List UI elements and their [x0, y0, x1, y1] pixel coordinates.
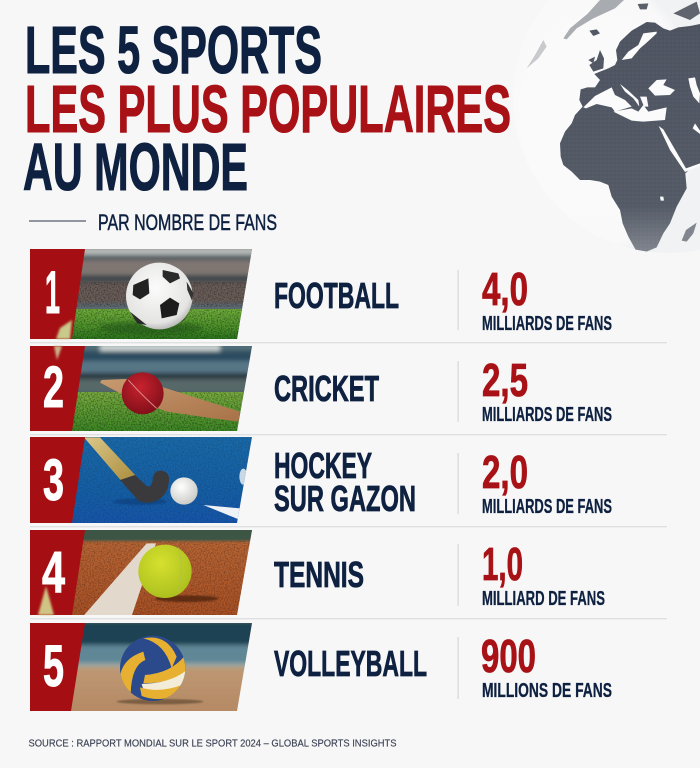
stat: volleyball: 900: [481, 630, 536, 682]
source: SOURCE : RAPPORT MONDIAL SUR LE SPORT 2024 – GLOBAL SPORTS INSIGHTS: [28, 738, 396, 750]
stat: cricket: [482, 354, 612, 426]
stat: football: 4,0: [482, 263, 528, 315]
icon: hockey stick: [84, 437, 169, 503]
divider: [458, 637, 459, 699]
title: [23, 13, 511, 205]
photo: hockey: [72, 437, 252, 523]
icon: cricket bat: [100, 379, 240, 422]
divider: [458, 270, 459, 330]
stat: tennis: MILLIARD DE FANS: [482, 588, 605, 610]
sport: hockey sur gazon: SUR GAZON: [274, 478, 416, 519]
map: continents: [515, 0, 700, 252]
photo: cricket: [72, 346, 252, 431]
icon: volleyball: [120, 636, 186, 701]
stat: tennis: [482, 538, 605, 610]
badge: rank 2: 2: [43, 355, 64, 420]
badge: rank 5: [30, 623, 85, 711]
stat: volleyball: MILLIONS DE FANS: [482, 680, 612, 702]
sport: volleyball: VOLLEYBALL: [274, 643, 427, 684]
icon: cricket ball: [122, 372, 164, 414]
divider: [458, 544, 459, 606]
photo: football: [72, 249, 252, 339]
sport: football: FOOTBALL: [274, 275, 399, 316]
subtitle: PAR NOMBRE DE FANS: [98, 210, 277, 235]
badge: rank 3: [30, 437, 85, 523]
badge: rank 5: 5: [43, 634, 64, 699]
icon: hockey ball: [170, 477, 198, 505]
icon: soccer ball: [126, 263, 193, 329]
divider: [458, 453, 459, 514]
icon: world globe: [527, 0, 700, 252]
badge: rank 4: 4: [42, 540, 65, 605]
badge: rank 1: [30, 249, 85, 339]
sport: hockey sur gazon: [274, 445, 416, 519]
photo: tennis: [72, 530, 252, 615]
photo: volleyball: [71, 623, 252, 711]
stat: cricket: 2,5: [482, 354, 528, 406]
badge: rank 4: [30, 530, 85, 615]
stat: tennis: 1,0: [482, 538, 523, 590]
stat: football: [482, 263, 612, 335]
court line: [83, 543, 156, 616]
badge: rank 2: [30, 346, 85, 431]
stat: football: MILLIARDS DE FANS: [482, 313, 612, 335]
stat: volleyball: [481, 630, 612, 702]
stat: hockey: [482, 446, 612, 518]
stat: hockey: 2,0: [482, 446, 528, 498]
sport: tennis: TENNIS: [274, 554, 364, 595]
stat: cricket: MILLIARDS DE FANS: [482, 404, 612, 426]
icon: tennis ball: [138, 545, 192, 598]
row separators: [30, 342, 667, 619]
sport: cricket: CRICKET: [274, 368, 379, 409]
divider: [458, 361, 459, 422]
badge: rank 1: 1: [45, 259, 60, 326]
sport: hockey sur gazon: HOCKEY: [274, 445, 372, 486]
stat: hockey: MILLIARDS DE FANS: [482, 496, 612, 518]
title: AU MONDE: [23, 130, 248, 205]
title: LES 5 SPORTS: [25, 13, 322, 88]
badge: rank 3: 3: [43, 448, 64, 513]
